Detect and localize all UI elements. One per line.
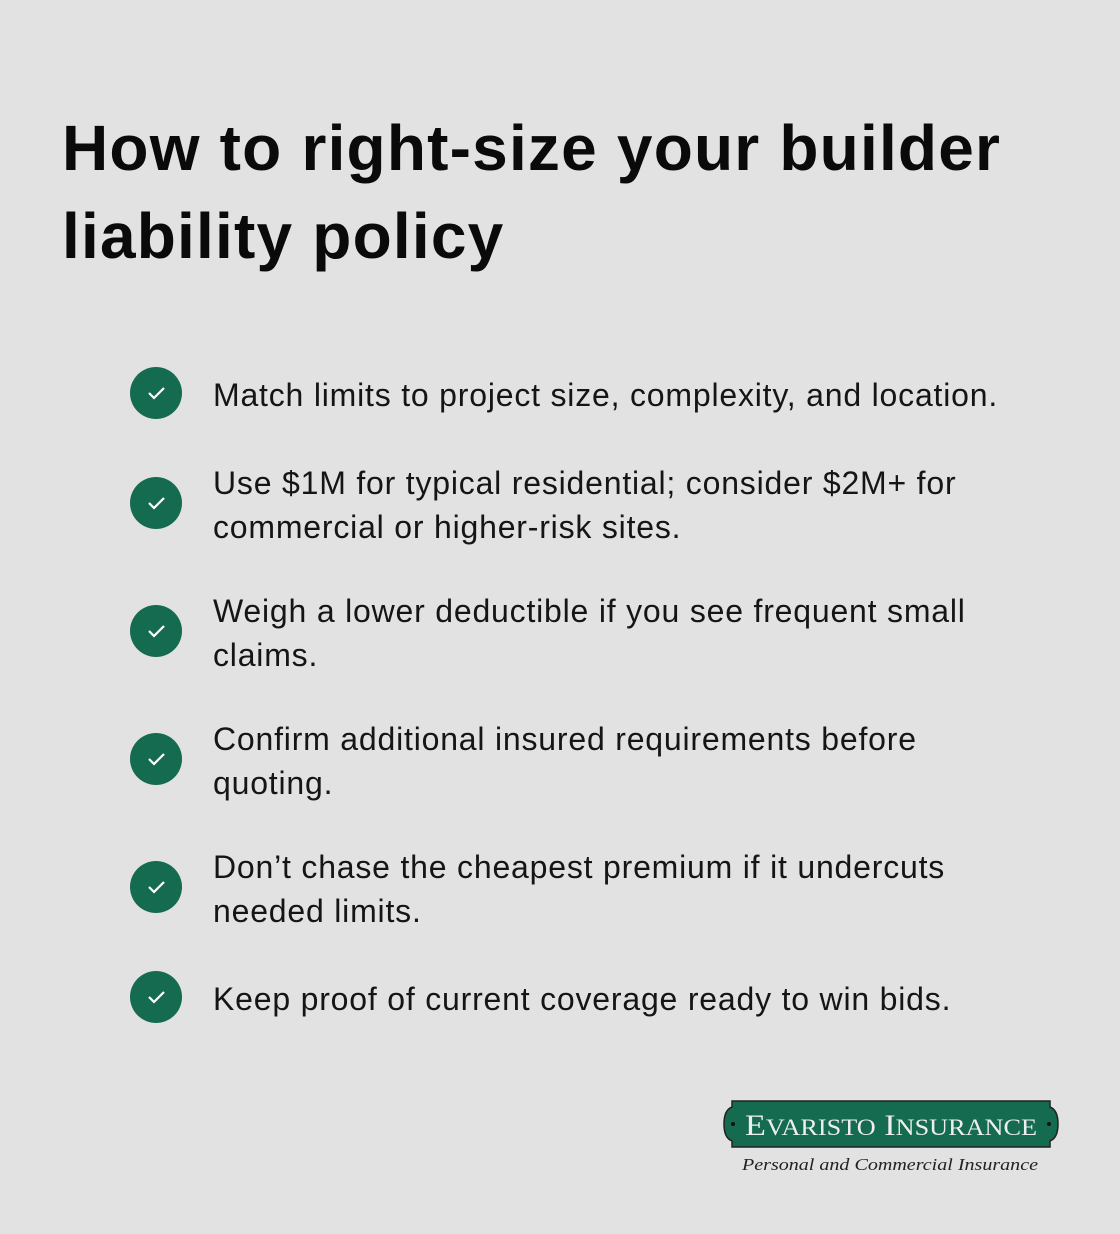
item 6 [130, 971, 951, 1023]
text 1: Match limits to project size, complexity, and location. [213, 377, 998, 413]
logo: EVARISTO INSURANCE [745, 1109, 1037, 1142]
icon: check [130, 861, 182, 913]
item 4 [130, 721, 917, 801]
text 3: Weigh a lower deductible if you see frequent small [213, 593, 966, 629]
text 3 [213, 593, 966, 673]
text 2: Use $1M for typical residential; consider $2M+ for [213, 465, 956, 501]
logo [723, 1100, 1059, 1174]
text 6: Keep proof of current coverage ready to win bids. [213, 981, 951, 1017]
item 2 [130, 465, 956, 545]
text 4 [213, 721, 917, 801]
text 5: Don’t chase the cheapest premium if it undercuts [213, 849, 945, 885]
text 4: quoting. [213, 765, 333, 801]
text 5 [213, 849, 945, 929]
text 4: Confirm additional insured requirements before [213, 721, 917, 757]
item 5 [130, 849, 945, 929]
text 2 [213, 465, 956, 545]
title [62, 112, 1001, 272]
title: How to right-size your builder [62, 112, 1001, 184]
icon: check [130, 605, 182, 657]
text 2: commercial or higher-risk sites. [213, 509, 681, 545]
title: liability policy [62, 200, 504, 272]
text 5: needed limits. [213, 893, 422, 929]
item 3 [130, 593, 966, 673]
item 1 [130, 367, 998, 419]
icon: check [130, 367, 182, 419]
text 3: claims. [213, 637, 318, 673]
logo: Personal and Commercial Insurance [741, 1155, 1039, 1174]
icon: check [130, 733, 182, 785]
icon: check [130, 477, 182, 529]
icon: check [130, 971, 182, 1023]
